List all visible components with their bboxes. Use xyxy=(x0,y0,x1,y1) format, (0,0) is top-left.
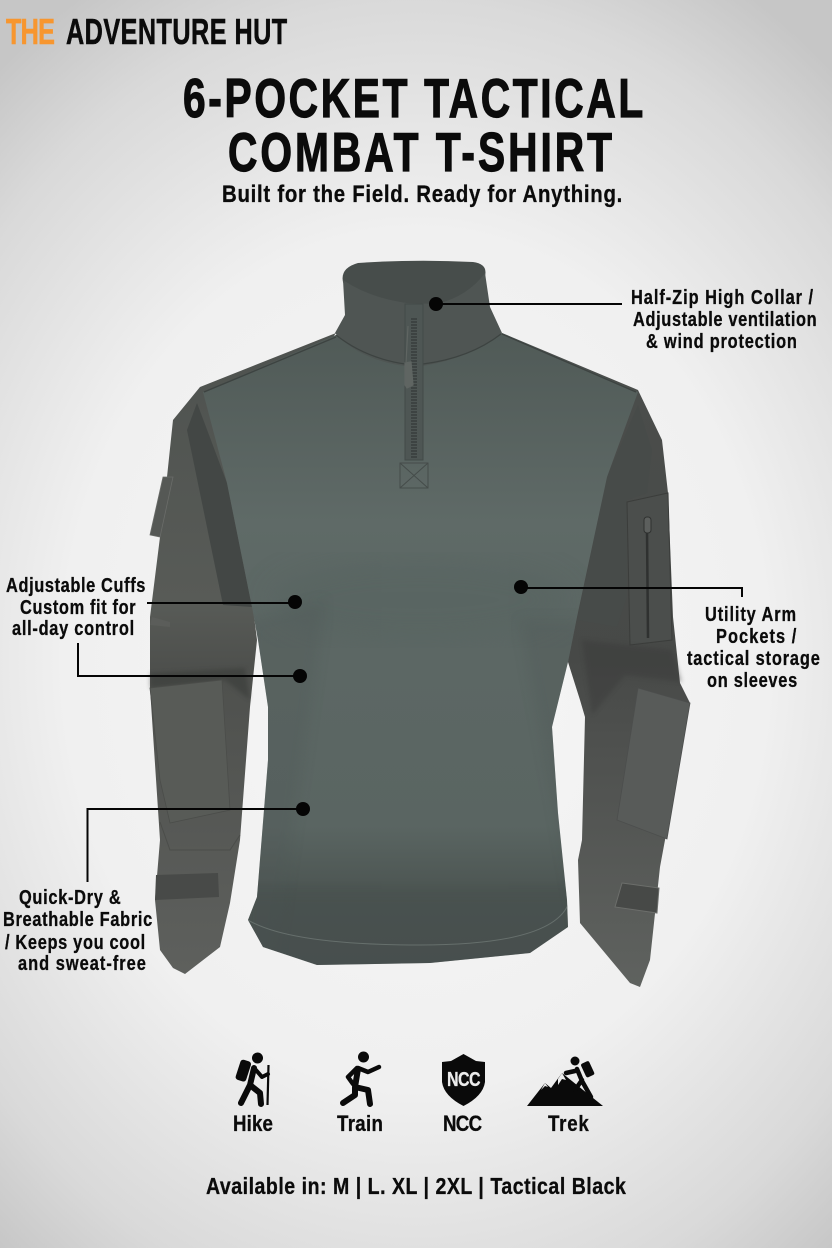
logo: ADVENTURE HUT xyxy=(66,12,287,52)
right arm pocket xyxy=(627,493,672,645)
right sleeve xyxy=(502,333,690,987)
body shading xyxy=(240,560,610,980)
callout: quick-dry fabric: Breathable Fabric xyxy=(3,907,152,930)
callout: quick-dry fabric: Quick-Dry & xyxy=(19,885,121,908)
collar inside xyxy=(343,261,486,325)
callout: adjustable cuffs: Adjustable Cuffs xyxy=(6,573,145,596)
logo: THE xyxy=(6,12,55,52)
shirt illustration xyxy=(150,261,690,987)
availability line: Available in: M | L. XL | 2XL | Tactical Black xyxy=(206,1174,626,1199)
right arm zip pull xyxy=(644,517,651,533)
callout: utility arm pockets: Pockets / xyxy=(716,624,796,647)
icon: train xyxy=(343,1052,379,1104)
right velcro xyxy=(615,883,659,913)
callout: quick-dry fabric: and sweat-free xyxy=(18,951,146,974)
yoke seam xyxy=(204,334,636,392)
label: hike: Hike xyxy=(233,1113,273,1136)
collar front xyxy=(335,273,502,366)
callout: utility arm pockets: Utility Arm xyxy=(705,602,796,625)
left lower flap xyxy=(150,617,170,627)
callout: quick-dry fabric xyxy=(3,802,310,974)
right arm zip xyxy=(647,530,648,638)
callout line: fabric xyxy=(88,809,303,882)
callout: adjustable cuffs: all-day control xyxy=(12,616,134,639)
subtitle: Built for the Field. Ready for Anything. xyxy=(222,180,622,207)
callout: half-zip collar: & wind protection xyxy=(646,329,797,352)
icon: trek mountain xyxy=(527,1056,603,1106)
callout line: cuffs xyxy=(147,602,295,604)
label: ncc: NCC xyxy=(443,1113,482,1136)
icon: hike xyxy=(235,1052,268,1105)
right sleeve shadow xyxy=(582,640,682,715)
callout line: collar xyxy=(436,303,622,305)
left forearm shadow xyxy=(150,668,250,700)
callout line: arm pockets xyxy=(521,588,742,597)
icon: ncc shield xyxy=(442,1054,485,1106)
zipper pull xyxy=(405,326,413,388)
left forearm pocket xyxy=(150,680,230,823)
left arm pocket flap xyxy=(150,477,173,537)
label: trek: Trek xyxy=(548,1113,589,1136)
title: 6-POCKET TACTICAL xyxy=(183,68,643,130)
zipper teeth xyxy=(411,318,417,458)
callout: adjustable cuffs xyxy=(6,573,307,683)
title: COMBAT T-SHIRT xyxy=(228,122,612,184)
right sleeve mesh xyxy=(577,405,652,627)
callout: utility arm pockets: on sleeves xyxy=(707,668,797,691)
callout: half-zip collar xyxy=(429,285,817,352)
callout: utility arm pockets xyxy=(514,580,820,691)
callout: quick-dry fabric: / Keeps you cool xyxy=(5,930,145,953)
callout: utility arm pockets: tactical storage xyxy=(687,646,820,669)
left sleeve xyxy=(150,333,336,974)
left cuff fold xyxy=(160,822,240,850)
collar seam xyxy=(336,334,501,364)
label: train: Train xyxy=(337,1113,383,1136)
title xyxy=(183,68,643,184)
body xyxy=(203,333,638,965)
zip box stitching xyxy=(400,463,428,488)
callout: adjustable cuffs: Custom fit for xyxy=(20,595,136,618)
icon: ncc shield: NCC xyxy=(447,1068,481,1090)
right forearm pocket xyxy=(617,688,690,839)
left velcro xyxy=(155,873,219,900)
left sleeve mesh xyxy=(187,403,252,607)
callout: half-zip collar: Half-Zip High Collar / xyxy=(631,285,813,308)
zipper placket xyxy=(405,304,423,460)
callout: half-zip collar: Adjustable ventilation xyxy=(633,307,817,330)
